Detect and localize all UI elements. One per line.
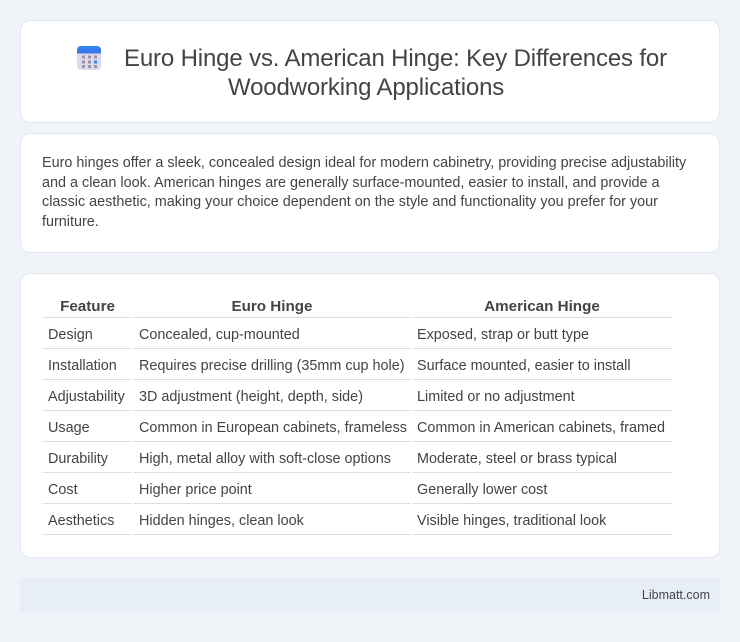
intro text: furniture. [42,214,99,230]
footer text: source: Libmatt.com [642,588,710,602]
row: aesthetics: Hidden hinges, clean look [139,513,304,529]
row: installation: Installation [48,358,117,374]
row: usage: Usage [48,420,90,436]
row: cost: Cost [48,482,78,498]
icon: calendar grid [77,46,101,70]
row: durability: High, metal alloy with soft-close options [139,451,391,467]
row: durability: Moderate, steel or brass typical [417,451,617,467]
intro text [42,155,686,230]
row: adjustability [48,389,575,405]
title [124,45,667,101]
row: usage [48,420,665,436]
title: Woodworking Applications [228,74,504,101]
table header: euro hinge: Euro Hinge [231,298,312,315]
row: aesthetics: Visible hinges, traditional look [417,513,606,529]
table header: american hinge: American Hinge [484,298,600,315]
row: aesthetics: Aesthetics [48,513,114,529]
row: durability: Durability [48,451,108,467]
row: installation: Requires precise drilling (35mm cup hole) [139,358,405,374]
row: adjustability: 3D adjustment (height, depth, side) [139,389,363,405]
row: cost: Generally lower cost [417,482,547,498]
row: installation [48,358,631,374]
row: design [48,327,589,343]
row: usage: Common in European cabinets, frameless [139,420,407,436]
row: installation: Surface mounted, easier to install [417,358,631,374]
row: adjustability: Adjustability [48,389,125,405]
row: adjustability: Limited or no adjustment [417,389,575,405]
intro text: classic aesthetic, making your choice dependent on the style and functionality you prefer for your [42,194,658,210]
intro text: and a clean look. American hinges are generally surface-mounted, easier to install, and provide a [42,174,660,190]
row: aesthetics [48,513,606,529]
row: cost [48,482,548,498]
row: design: Design [48,327,93,343]
row: cost: Higher price point [139,482,252,498]
intro text: Euro hinges offer a sleek, concealed design ideal for modern cabinetry, providing precise adjustability [42,155,686,171]
row: usage: Common in American cabinets, framed [417,420,665,436]
row: design: Concealed, cup-mounted [139,327,300,343]
header panel [20,20,720,123]
title: Euro Hinge vs. American Hinge: Key Differences for [124,45,667,72]
footer bar [20,578,720,612]
row: design: Exposed, strap or butt type [417,327,589,343]
table header: feature: Feature [60,298,115,315]
panel: comparison table [20,273,720,558]
intro panel [20,133,720,253]
row: durability [48,451,617,467]
